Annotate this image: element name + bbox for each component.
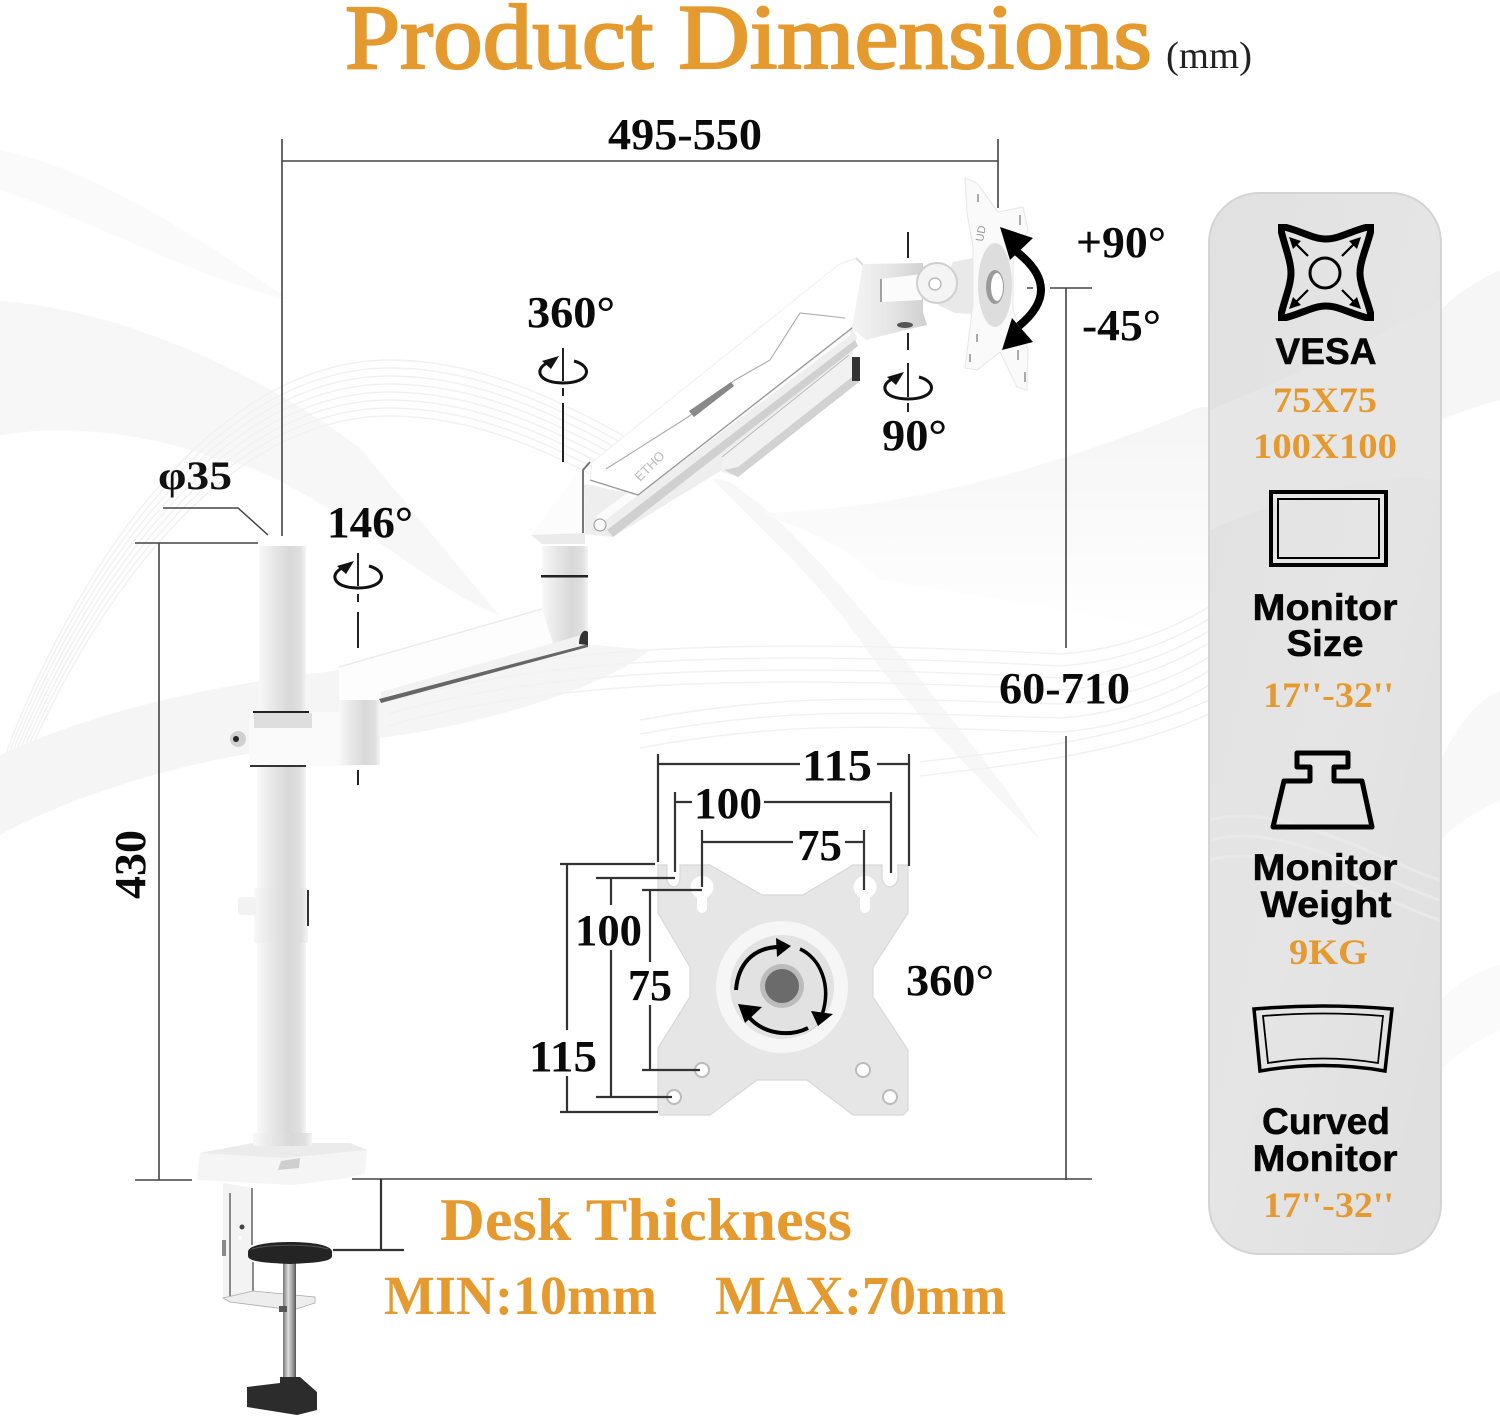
- VESA height dimensions: 115: [529, 1032, 597, 1081]
- desk thickness text: MAX:70mm: [715, 1265, 1006, 1326]
- VESA height dimensions: [529, 864, 702, 1112]
- value: monitor size: 17''-32'': [1263, 675, 1394, 715]
- gas spring upper arm: ETHO: [632, 448, 668, 484]
- VESA 360 label: 360°: [906, 956, 994, 1005]
- clamp bracket and desk grommet: [222, 1183, 332, 1415]
- label: monitor size: Size: [1286, 623, 1364, 664]
- gas spring upper arm: [531, 258, 866, 544]
- rotation indicator: 146 degrees: [327, 498, 413, 785]
- title: (mm): [1166, 35, 1252, 77]
- tilt labels: +90°: [1076, 218, 1166, 267]
- icon: weight: [1273, 753, 1372, 827]
- VESA width dimensions: 100: [694, 779, 762, 828]
- VESA plate front view: [658, 865, 908, 1115]
- dimension: pole diameter: φ35: [158, 453, 232, 498]
- VESA width dimensions: 75: [797, 821, 842, 870]
- desk thickness text: MIN:10mm: [384, 1265, 657, 1326]
- pole collar and arm knuckle: [230, 700, 380, 767]
- label: VESA: VESA: [1276, 331, 1376, 372]
- label: monitor weight: Monitor: [1252, 847, 1398, 888]
- VESA height dimensions: 75: [628, 961, 672, 1010]
- label: monitor weight: Weight: [1260, 884, 1392, 925]
- tilt arrow: [1000, 227, 1041, 350]
- head joint: [852, 258, 973, 340]
- dimension: pole diameter: [158, 453, 268, 535]
- rotation indicator: 90 degrees: 90°: [882, 411, 947, 460]
- tilt labels: [1076, 218, 1166, 350]
- value: curved monitor: 17''-32'': [1263, 1185, 1394, 1225]
- value: VESA sizes: 100X100: [1253, 426, 1397, 466]
- VESA width dimensions: 115: [802, 741, 872, 790]
- VESA width dimensions: [658, 741, 909, 890]
- 360 rotation arrows on VESA plate: [736, 938, 833, 1033]
- rotation indicator: 360 degrees: [527, 288, 615, 462]
- dimension lines: height 60-710: 60-710: [999, 664, 1130, 713]
- label: curved monitor: [1252, 1101, 1398, 1179]
- desk thickness text: Desk Thickness: [440, 1187, 852, 1253]
- label: monitor weight: [1252, 847, 1398, 925]
- monitor VESA plate (side view): UD: [974, 225, 989, 243]
- arm: lower section: [339, 546, 588, 726]
- icon: VESA mount: [1280, 226, 1372, 319]
- side panel: specifications: [1209, 193, 1441, 1254]
- dimension lines: width 495-550: [282, 110, 998, 536]
- tilt labels: -45°: [1082, 301, 1161, 350]
- dimension lines: pole height 430: [106, 543, 258, 1180]
- value: VESA sizes: 75X75: [1273, 380, 1377, 420]
- label: monitor size: [1252, 587, 1398, 664]
- monitor VESA plate (side view): [965, 178, 1028, 390]
- rotation indicator: 146 degrees: 146°: [327, 498, 413, 547]
- desk thickness text: [384, 1187, 1006, 1326]
- desk thickness dimension lines: [333, 1179, 404, 1250]
- rotation indicator: 360 degrees: 360°: [527, 288, 615, 337]
- rotation indicator: 90 degrees: [882, 232, 947, 460]
- label: curved monitor: Monitor: [1252, 1138, 1398, 1179]
- value: VESA sizes: [1253, 380, 1397, 466]
- clamp base plate: [197, 1133, 367, 1185]
- icon: monitor: [1271, 492, 1386, 565]
- value: monitor weight: 9KG: [1289, 932, 1368, 972]
- label: curved monitor: Curved: [1262, 1101, 1390, 1142]
- dimension lines: width 495-550: 495-550: [608, 110, 762, 159]
- VESA height dimensions: 100: [575, 906, 642, 955]
- icon: curved monitor: [1254, 1006, 1392, 1071]
- main pole: [238, 546, 309, 1138]
- label: monitor size: Monitor: [1252, 587, 1398, 628]
- dimension lines: pole height 430: 430: [106, 830, 155, 899]
